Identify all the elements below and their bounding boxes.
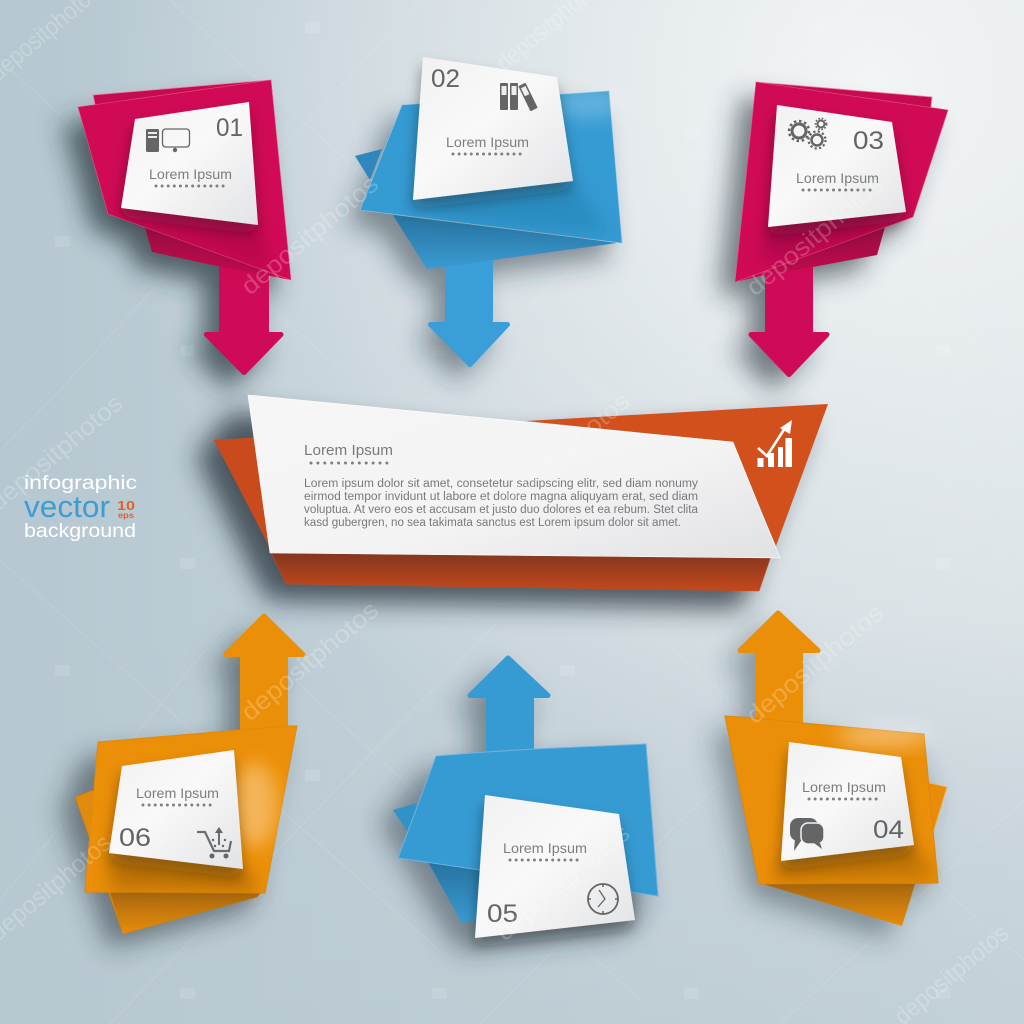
panel: step 01 pink [62, 80, 291, 391]
dots [143, 804, 213, 806]
heading: Lorem Ipsum [149, 166, 232, 182]
watermark text: depositphotos [491, 387, 635, 515]
body text: Lorem ipsum dolor sit amet, consetetur sadipscing elitr, sed diam nonumy [304, 478, 698, 490]
icon: gears [789, 118, 826, 148]
heading: Lorem Ipsum [136, 785, 219, 801]
card 05 [475, 795, 635, 938]
card 04 [781, 742, 914, 861]
dots [453, 152, 523, 156]
panel: step 02 blue [347, 57, 624, 382]
number 03: 03 [853, 127, 884, 155]
heading: Lorem Ipsum [304, 442, 393, 459]
panel: step 03 pink [719, 82, 948, 392]
dots [156, 184, 226, 188]
card 01 [121, 102, 258, 225]
number 04: 04 [873, 816, 904, 844]
icon: speech bubbles [790, 818, 824, 851]
logo: infographic vector background: infographic [24, 473, 137, 494]
watermark text: depositphotos [236, 170, 384, 301]
number 02: 02 [431, 65, 460, 93]
text card [248, 395, 780, 558]
icon: binders [500, 83, 538, 111]
heading: Lorem Ipsum [802, 779, 886, 795]
dots [803, 188, 873, 192]
watermark text: depositphotos [491, 819, 635, 947]
heading: Lorem Ipsum [503, 840, 587, 856]
dots [809, 798, 879, 800]
icon: computer [146, 129, 190, 152]
icon: cart [197, 827, 231, 858]
number 06: 06 [119, 824, 151, 852]
number 05: 05 [487, 900, 518, 928]
highlight [837, 723, 933, 747]
panel: step 06 amber [60, 616, 303, 949]
logo: infographic vector background: vector [24, 489, 110, 524]
panel: step 04 amber [711, 613, 947, 940]
body text [304, 478, 699, 529]
logo: infographic vector background: eps [118, 511, 135, 520]
heading: Lorem Ipsum [796, 170, 879, 186]
body text: kasd gubergren, no sea takimata sanctus est Lorem ipsum dolor sit amet. [304, 517, 681, 529]
highlight [233, 763, 277, 847]
highlight [556, 87, 624, 119]
panel: step 05 blue [379, 658, 658, 952]
icon: growth chart [758, 420, 792, 467]
card 03 [768, 105, 906, 227]
watermark text: depositphotos [236, 596, 384, 727]
number 01: 01 [216, 114, 243, 142]
logo: infographic vector background [24, 473, 137, 542]
logo: infographic vector background: background [24, 521, 136, 542]
card 02 [413, 57, 573, 200]
panel: central text banner [196, 395, 828, 609]
icon: clock [588, 884, 618, 914]
heading: Lorem Ipsum [446, 134, 529, 150]
body text: voluptua. At vero eos et accusam et justo duo dolores et ea rebum. Stet clita [304, 504, 699, 516]
body text: eirmod tempor invidunt ut labore et dolore magna aliquyam erat, sed diam [304, 491, 698, 503]
watermark text: depositphotos [741, 171, 889, 302]
logo: infographic vector background: 10 [117, 498, 135, 513]
card 06 [109, 750, 243, 869]
dots [510, 858, 580, 862]
watermark text: depositphotos [741, 599, 889, 730]
dots [311, 462, 387, 464]
